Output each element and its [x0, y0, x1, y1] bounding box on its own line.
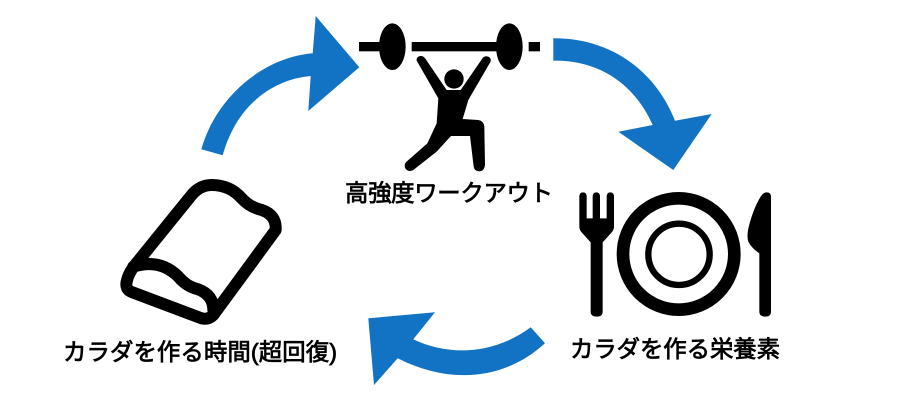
- icon: plate and cutlery: [579, 192, 771, 317]
- label: high intensity workout: 高強度ワークアウト: [345, 180, 553, 206]
- arrow: workout to nutrition: [553, 38, 712, 170]
- arrow: nutrition to recovery: [368, 312, 545, 385]
- arrow: recovery to workout: [201, 16, 359, 155]
- icon: weightlifter: [359, 23, 540, 171]
- icon: pillow: [126, 185, 276, 319]
- label: nutrition that builds the body: カラダを作る栄養素: [570, 336, 780, 362]
- label: body building time: カラダを作る時間(超回復): [63, 339, 337, 365]
